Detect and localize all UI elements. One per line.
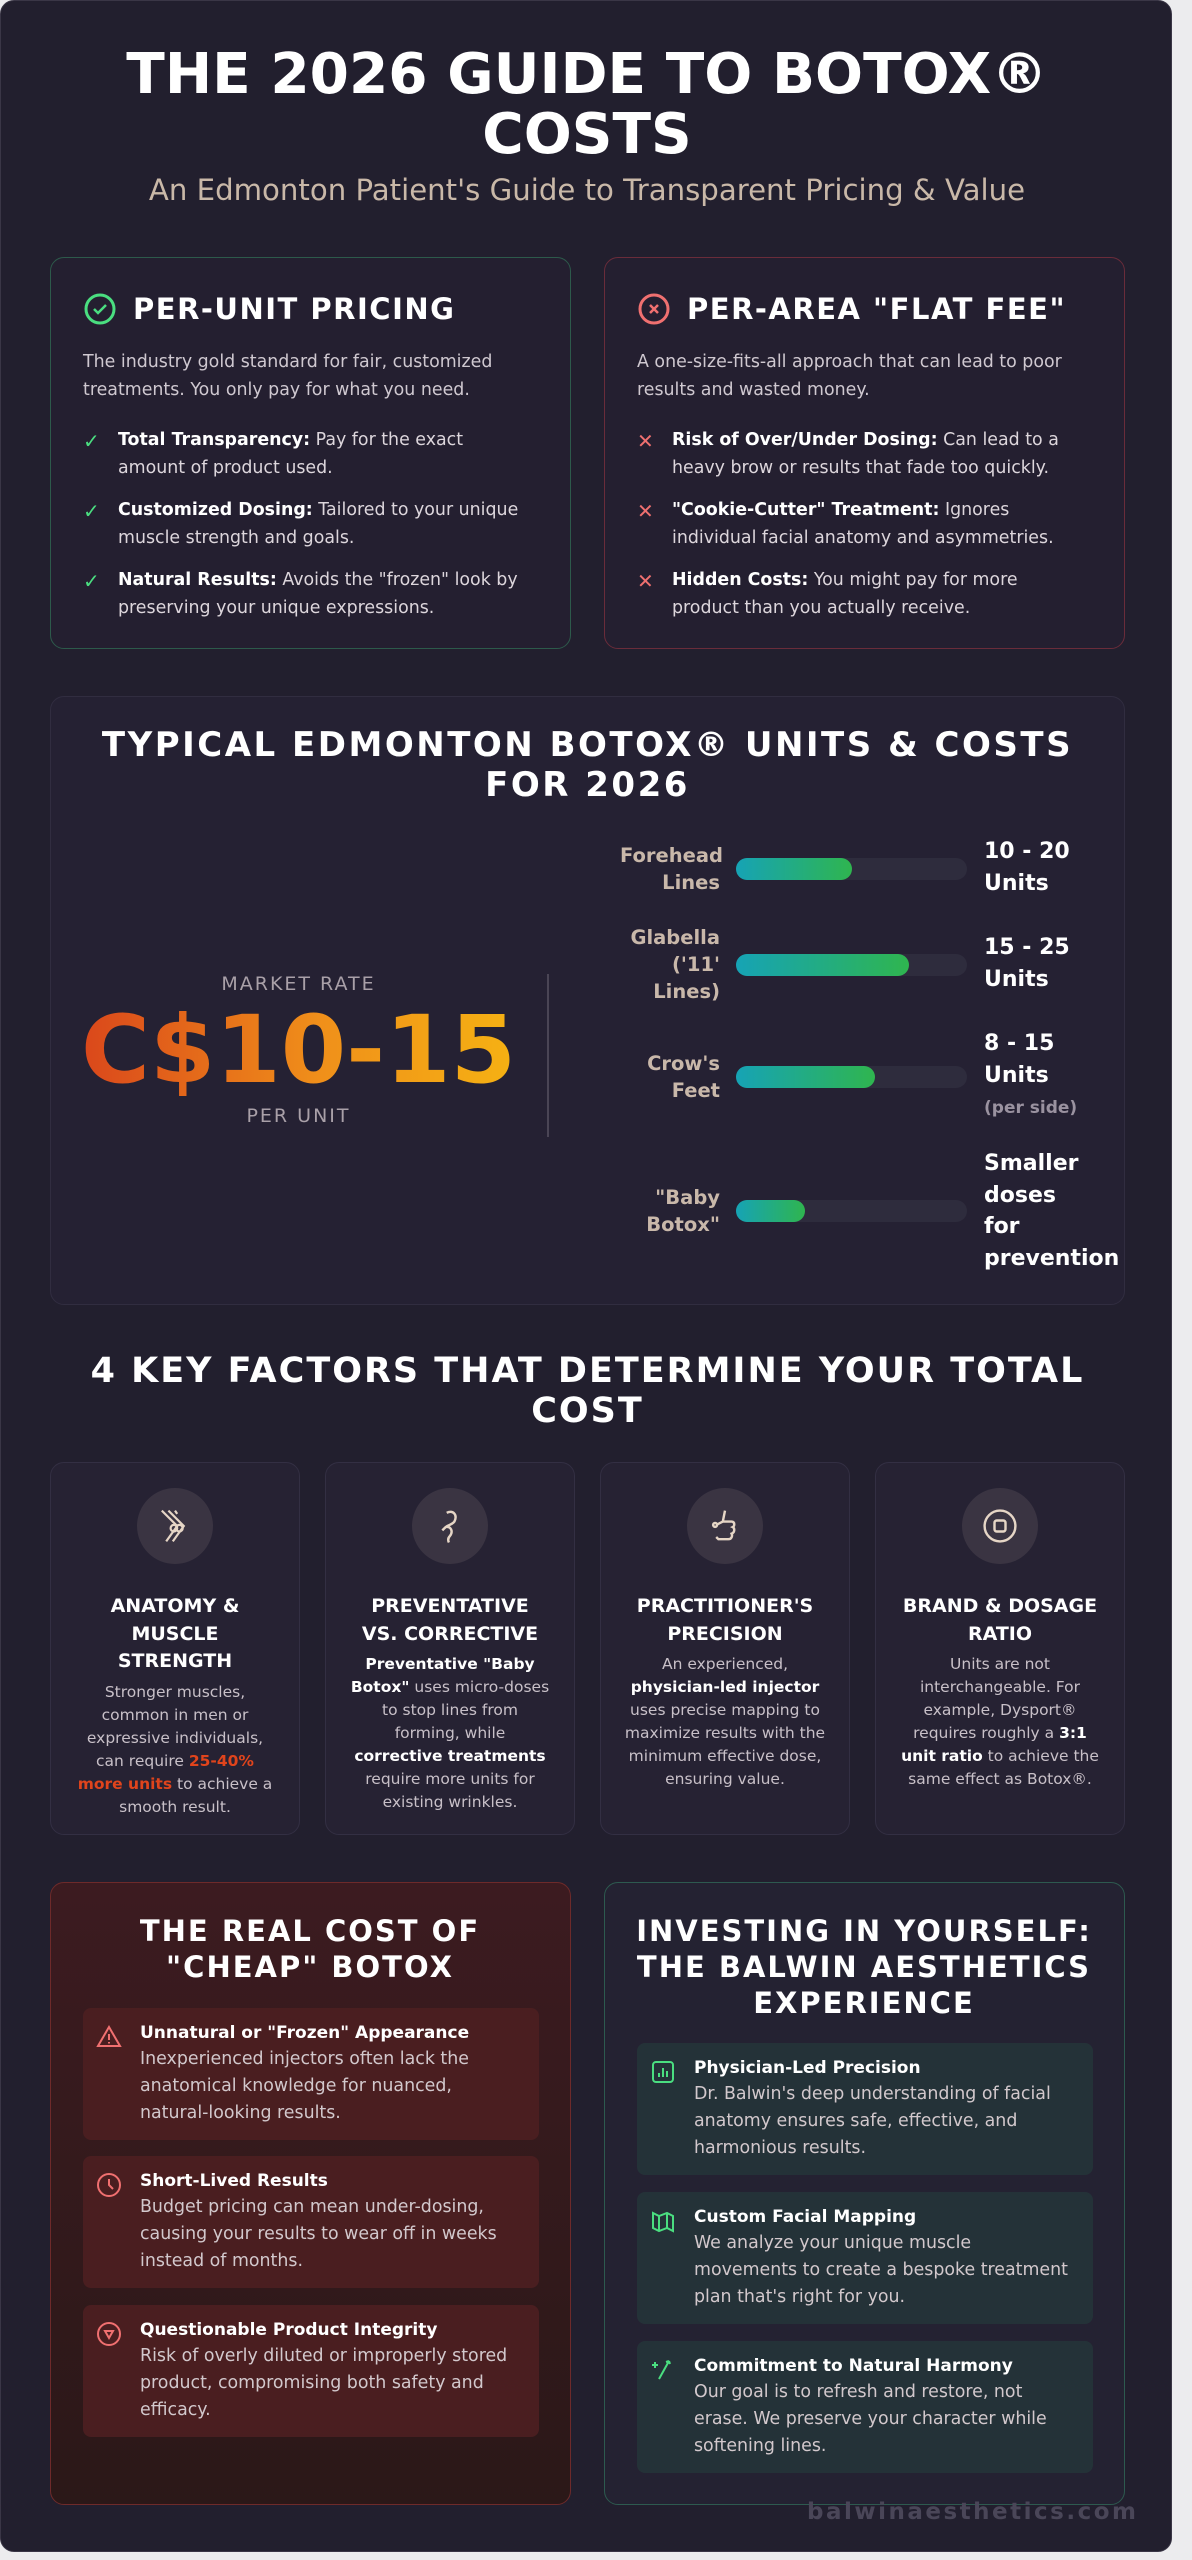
icon: target [962,1488,1038,1564]
title [126,42,1048,167]
item: short lived: Budget pricing can mean under-dosing, causing your results to wear off in weeks instead of months. [140,2197,497,2271]
bullets: ✓ [83,569,100,593]
item: frozen [83,2008,539,2140]
factor card: anatomy [50,1462,300,1835]
bullets [83,429,518,618]
factor card: precision [600,1462,850,1835]
item: frozen: Inexperienced injectors often lack the anatomical knowledge for nuanced, natural-looking results. [140,2049,469,2123]
heading [140,1914,480,1984]
heading: flat fee: PER-AREA "FLAT FEE" [687,292,1066,326]
factor card: preventative [325,1462,575,1835]
heading: INVESTING IN YOURSELF: [636,1914,1092,1948]
market rate price: C$10-15 [81,996,516,1105]
heading: 4 key factors: COST [531,1391,644,1431]
title: THE 2026 GUIDE TO BOTOX® [126,42,1048,107]
heading: 4 key factors: 4 KEY FACTORS THAT DETERMINE YOUR TOTAL [91,1351,1084,1391]
item: physician-led: Dr. Balwin's deep understanding of facial anatomy ensures safe, effective, and harmonious results. [694,2084,1051,2158]
icon: muscle [137,1488,213,1564]
main card: 10 - 20 Units [984,839,1070,896]
heading: units & costs: TYPICAL EDMONTON BOTOX® UNITS & COSTS [102,725,1073,765]
factor card: brand: BRAND & DOSAGE [903,1595,1097,1617]
item: mapping: We analyze your unique muscle movements to create a bespoke treatment plan that's right for you. [694,2233,1068,2307]
factor card: anatomy: STRENGTH [118,1650,232,1672]
item: integrity: Questionable Product Integrity [140,2320,437,2340]
bar chart: units per area [620,839,1119,1270]
factor card: preventative: VS. CORRECTIVE [362,1622,538,1644]
factor card: brand [875,1462,1125,1835]
main card: "Baby Botox" [646,1186,720,1236]
heading: per-unit pricing: PER-UNIT PRICING [133,292,455,326]
bullets: Total Transparency: Pay for the exact amount of product used. [118,430,463,478]
factor card: preventative: PREVENTATIVE [371,1595,529,1617]
market rate price: MARKET RATE [221,973,376,995]
factor card: preventative: corrective treatments require more units for existing wrinkles. [354,1747,546,1811]
title: COSTS [482,102,692,167]
main card: 8 - 15 Units [984,1031,1054,1088]
item: harmony: Commitment to Natural Harmony [694,2356,1013,2376]
factor card: precision: An experienced, physician-led injector uses precise mapping to maximize results with the minimum effective dose, ensuring value. [625,1655,825,1788]
factor card: brand: Units are not interchangeable. For example, Dysport® requires roughly a 3:1 unit ratio to achieve the same effect as Botox®. [901,1655,1099,1788]
bullets: ✕ [637,429,654,453]
factor card: precision: PRECISION [667,1622,783,1644]
bullets: ✕ [637,499,654,523]
bullets: ✓ [83,429,100,453]
item: physician-led [637,2043,1093,2175]
subtitle: An Edmonton Patient's Guide to Transparent Pricing & Value [149,173,1025,207]
panel: per-area flat fee [604,257,1125,649]
heading: THE REAL COST OF [140,1914,480,1948]
description: The industry gold standard for fair, customized treatments. You only pay for what you need. [83,352,492,400]
main card: 15 - 25 Units [984,935,1070,992]
main card: (per side) [984,1098,1077,1118]
watermark: balwinaesthetics.com [807,2499,1138,2525]
item: harmony: Our goal is to refresh and restore, not erase. We preserve your character while softening lines. [694,2382,1047,2456]
panel: real cost of cheap botox [50,1882,571,2505]
item: frozen: Unnatural or "Frozen" Appearance [140,2023,469,2043]
heading: "CHEAP" BOTOX [166,1950,454,1984]
bullets [637,429,1059,618]
heading: units & costs: FOR 2026 [485,765,690,805]
main card: Forehead Lines [620,844,723,894]
bullets: Customized Dosing: Tailored to your unique muscle strength and goals. [118,500,518,548]
panel: units & costs [50,696,1125,1305]
main card: Glabella ('11' Lines) [630,926,720,1003]
item: physician-led: Physician-Led Precision [694,2058,921,2078]
item: integrity [83,2305,539,2437]
item: integrity: Risk of overly diluted or improperly stored product, compromising both safety and efficacy. [140,2346,507,2420]
factor card: precision: PRACTITIONER'S [637,1595,813,1617]
heading: 4 key factors [91,1351,1084,1431]
heading: EXPERIENCE [753,1986,975,2020]
icon: face [412,1488,488,1564]
icon: hand [687,1488,763,1564]
item: harmony [637,2341,1093,2473]
factor card: anatomy: ANATOMY & [111,1595,239,1617]
bullets: "Cookie-Cutter" Treatment: Ignores individual facial anatomy and asymmetries. [672,500,1054,548]
factor card: preventative: Preventative "Baby Botox" uses micro-doses to stop lines from forming, while [351,1655,549,1742]
bullets: ✕ [637,569,654,593]
description: A one-size-fits-all approach that can lead to poor results and wasted money. [637,352,1062,400]
factor card: anatomy: Stronger muscles, common in men or expressive individuals, can require 25-40% more units to achieve a smooth result. [78,1682,272,1816]
bullets: Natural Results: Avoids the "frozen" look by preserving your unique expressions. [118,570,518,618]
bullets: ✓ [83,499,100,523]
factor card: anatomy: MUSCLE [131,1622,219,1644]
heading: units & costs [102,725,1073,805]
item: mapping [637,2192,1093,2324]
heading [636,1914,1092,2020]
heading: THE BALWIN AESTHETICS [637,1950,1091,1984]
item: short lived [83,2156,539,2288]
main card: Crow's Feet [647,1052,720,1102]
item: mapping: Custom Facial Mapping [694,2207,916,2227]
bullets: Risk of Over/Under Dosing: Can lead to a heavy brow or results that fade too quickly. [672,430,1059,478]
factor card: brand: RATIO [968,1622,1032,1644]
bullets: Hidden Costs: You might pay for more product than you actually receive. [672,570,1018,618]
main card: Smaller doses for prevention [984,1151,1119,1270]
market rate price: PER UNIT [246,1105,351,1127]
panel: per-unit pricing [50,257,571,649]
item: short lived: Short-Lived Results [140,2171,328,2191]
panel: balwin experience [604,1882,1125,2505]
